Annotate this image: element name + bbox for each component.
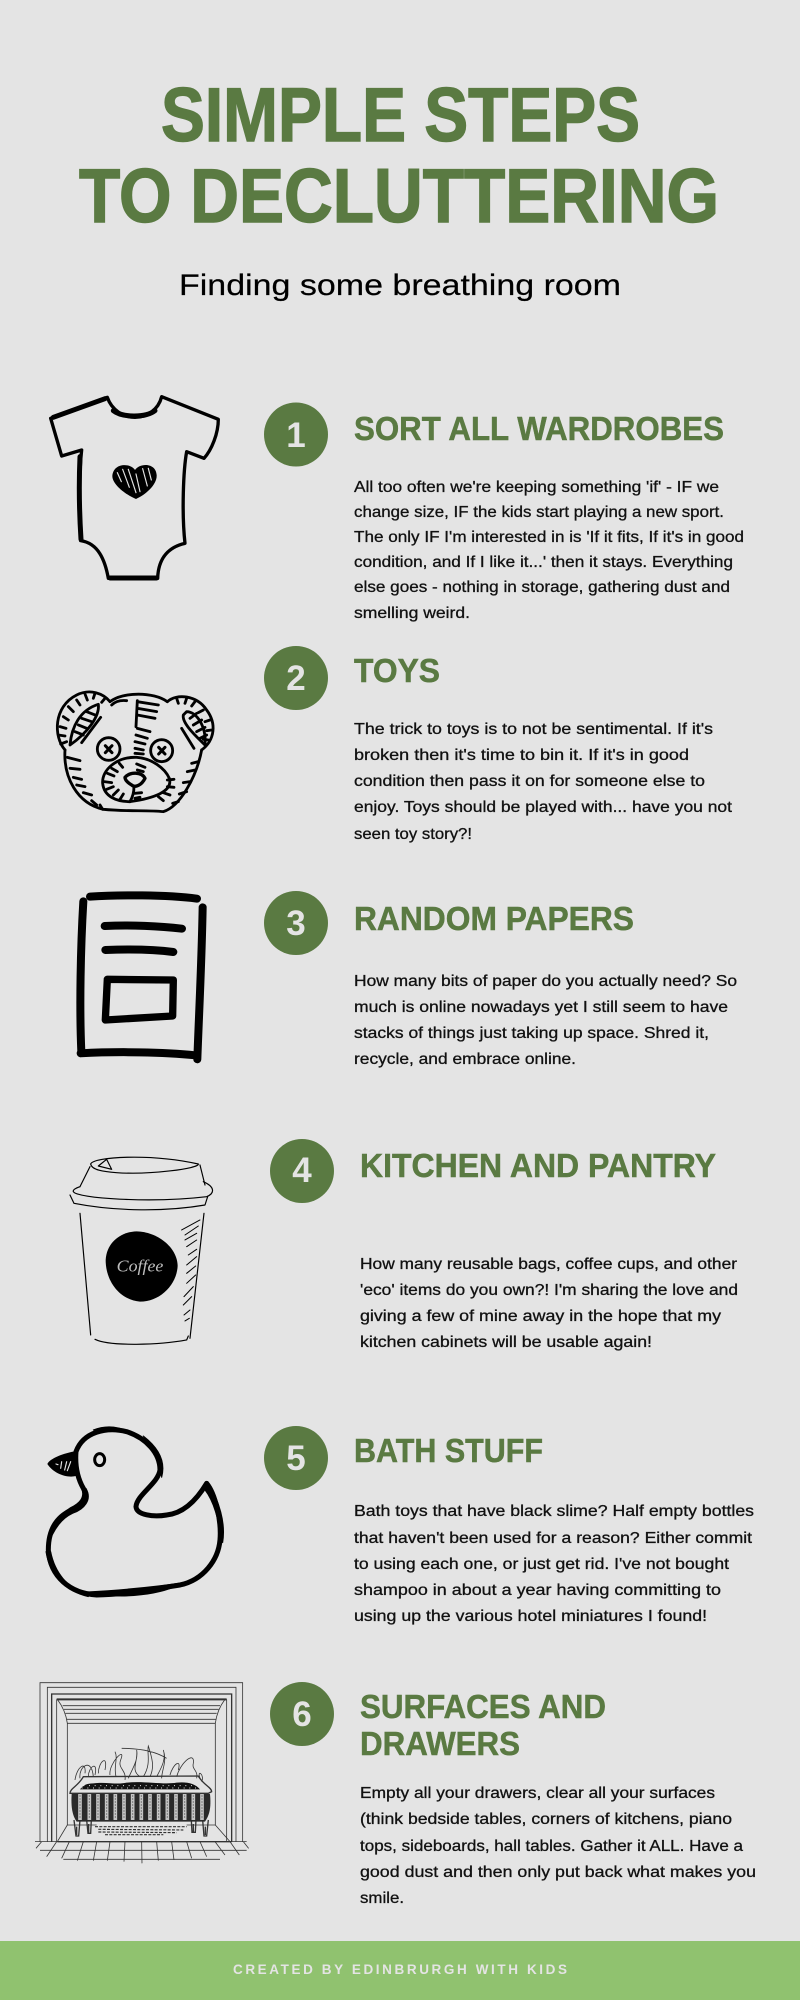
body text step 3: How many bits of paper do you actually need? So [354, 973, 737, 990]
body text step 6: (think bedside tables, corners of kitchens, piano [360, 1811, 732, 1828]
footer bar [0, 1941, 800, 2000]
body text step 4: kitchen cabinets will be usable again! [360, 1334, 652, 1351]
number badge 5 [264, 1426, 328, 1490]
number badge 5: 5 [286, 1439, 306, 1478]
body text step 2: seen toy story?! [354, 826, 472, 843]
number badge 4 [270, 1139, 334, 1203]
body text step 1: smelling weird. [354, 605, 470, 622]
body text step 6 [360, 1785, 756, 1907]
icon: coffee cup [70, 1157, 213, 1344]
body text step 1: change size, IF the kids start playing a new sport. [354, 504, 724, 521]
heading: random papers: RANDOM PAPERS [354, 900, 634, 937]
icon: teddy bear head [57, 692, 213, 812]
body text step 3: much is online nowadays yet I still seem to have [354, 999, 728, 1016]
number badge 3 [264, 891, 328, 955]
body text step 4: giving a few of mine away in the hope that my [360, 1308, 721, 1325]
body text step 6: tops, sideboards, hall tables. Gather it ALL. Have a [360, 1838, 743, 1855]
body text step 5: shampoo in about a year having committing to [354, 1582, 721, 1599]
icon: baby onesie [51, 397, 218, 578]
icon: rubber duck [46, 1427, 224, 1597]
panel: step 1 sort all wardrobes [51, 397, 744, 622]
body text step 1: condition, and If I like it...' then it stays. Everything [354, 554, 733, 571]
heading: bath stuff: BATH STUFF [354, 1432, 543, 1469]
footer credit: CREATED BY EDINBRURGH WITH KIDS [233, 1962, 567, 1977]
heading: surfaces and drawers: SURFACES AND [360, 1688, 606, 1725]
body text step 4 [360, 1256, 738, 1351]
body text step 6: smile. [360, 1890, 404, 1907]
body text step 5 [354, 1503, 754, 1625]
body text step 5: using up the various hotel miniatures I found! [354, 1608, 707, 1625]
icon: fireplace [35, 1683, 249, 1863]
body text step 4: 'eco' items do you own?! I'm sharing the love and [360, 1282, 738, 1299]
body text step 2: condition then pass it on for someone else to [354, 773, 705, 790]
body text step 6: good dust and then only put back what makes you [360, 1864, 756, 1881]
title [79, 73, 719, 239]
body text step 6: Empty all your drawers, clear all your surfaces [360, 1785, 715, 1802]
body text step 3 [354, 973, 737, 1068]
body text step 1: All too often we're keeping something 'if' - IF we [354, 479, 719, 496]
subtitle: Finding some breathing room [179, 269, 621, 302]
body text step 2: The trick to toys is to not be sentimental. If it's [354, 721, 713, 738]
body text step 3: recycle, and embrace online. [354, 1051, 576, 1068]
number badge 3: 3 [286, 904, 306, 943]
number badge 6: 6 [292, 1695, 312, 1734]
panel: step 2 toys [57, 646, 733, 843]
body text step 1: The only IF I'm interested in is 'If it fits, If it's in good [354, 529, 744, 546]
body text step 3: stacks of things just taking up space. Shred it, [354, 1025, 709, 1042]
body text step 5: to using each one, or just get rid. I've not bought [354, 1556, 730, 1573]
body text step 2: enjoy. Toys should be played with... have you not [354, 799, 733, 816]
title: SIMPLE STEPS [161, 73, 640, 158]
number badge 6 [270, 1682, 334, 1746]
icon: paper document [80, 895, 203, 1059]
body text step 5: that haven't been used for a reason? Either commit [354, 1530, 753, 1547]
number badge 1: 1 [286, 416, 306, 455]
panel: step 6 surfaces and drawers [35, 1682, 756, 1907]
body text step 4: How many reusable bags, coffee cups, and other [360, 1256, 738, 1273]
panel: step 5 bath stuff [46, 1426, 754, 1625]
body text step 1 [354, 479, 744, 622]
number badge 2: 2 [286, 659, 306, 698]
heading: kitchen and pantry: KITCHEN AND PANTRY [360, 1147, 716, 1184]
body text step 2 [354, 721, 733, 843]
panel: step 3 random papers [80, 891, 737, 1068]
body text step 2: broken then it's time to bin it. If it's in good [354, 747, 689, 764]
panel: step 4 kitchen and pantry [70, 1139, 738, 1351]
heading: surfaces and drawers: DRAWERS [360, 1725, 520, 1762]
number badge 2 [264, 646, 328, 710]
heading: sort all wardrobes: SORT ALL WARDROBES [354, 410, 724, 447]
heading: surfaces and drawers [360, 1688, 606, 1762]
heading: toys: TOYS [354, 652, 440, 689]
body text step 1: else goes - nothing in storage, gathering dust and [354, 579, 730, 596]
number badge 4: 4 [292, 1151, 312, 1190]
body text step 5: Bath toys that have black slime? Half empty bottles [354, 1503, 754, 1520]
title: TO DECLUTTERING [79, 154, 719, 239]
coffee label: Coffee [117, 1256, 164, 1275]
number badge 1 [264, 402, 328, 466]
